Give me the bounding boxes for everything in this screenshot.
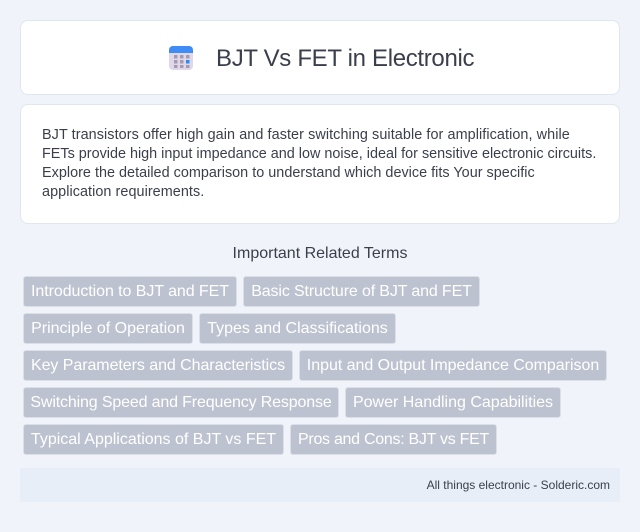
tag	[23, 387, 339, 418]
tag	[23, 350, 293, 381]
tag: Switching Speed and Frequency Response	[30, 394, 332, 411]
tag: Types and Classifications	[207, 320, 388, 337]
tag: Pros and Cons: BJT vs FET	[298, 431, 489, 448]
tag: Basic Structure of BJT and FET	[251, 283, 472, 300]
description text	[42, 127, 596, 200]
tag	[243, 276, 480, 307]
footer	[20, 468, 620, 502]
description text: Explore the detailed comparison to understand which device fits Your specific	[42, 165, 535, 181]
icon: calendar grid	[169, 46, 193, 70]
header card	[20, 20, 620, 95]
tag: Introduction to BJT and FET	[31, 283, 229, 300]
tag	[199, 313, 396, 344]
tag: Principle of Operation	[31, 320, 185, 337]
tag: Key Parameters and Characteristics	[31, 357, 285, 374]
tag	[23, 313, 193, 344]
tag	[23, 424, 284, 455]
description text: BJT transistors offer high gain and faster switching suitable for amplification, while	[42, 127, 570, 143]
footer credit: All things electronic - Solderic.com	[427, 478, 610, 492]
description text: application requirements.	[42, 184, 204, 200]
description text: FETs provide high input impedance and low noise, ideal for sensitive electronic circuits.	[42, 146, 596, 162]
tag	[23, 276, 237, 307]
title: BJT Vs FET in Electronic	[216, 45, 474, 72]
tag: Power Handling Capabilities	[353, 394, 553, 411]
heading: related terms: Important Related Terms	[233, 245, 407, 262]
tag	[299, 350, 607, 381]
panel: description	[20, 104, 620, 224]
tag	[345, 387, 561, 418]
panel: term tags	[23, 276, 607, 455]
tag	[290, 424, 497, 455]
tag: Typical Applications of BJT vs FET	[31, 431, 276, 448]
tag: Input and Output Impedance Comparison	[307, 357, 599, 374]
